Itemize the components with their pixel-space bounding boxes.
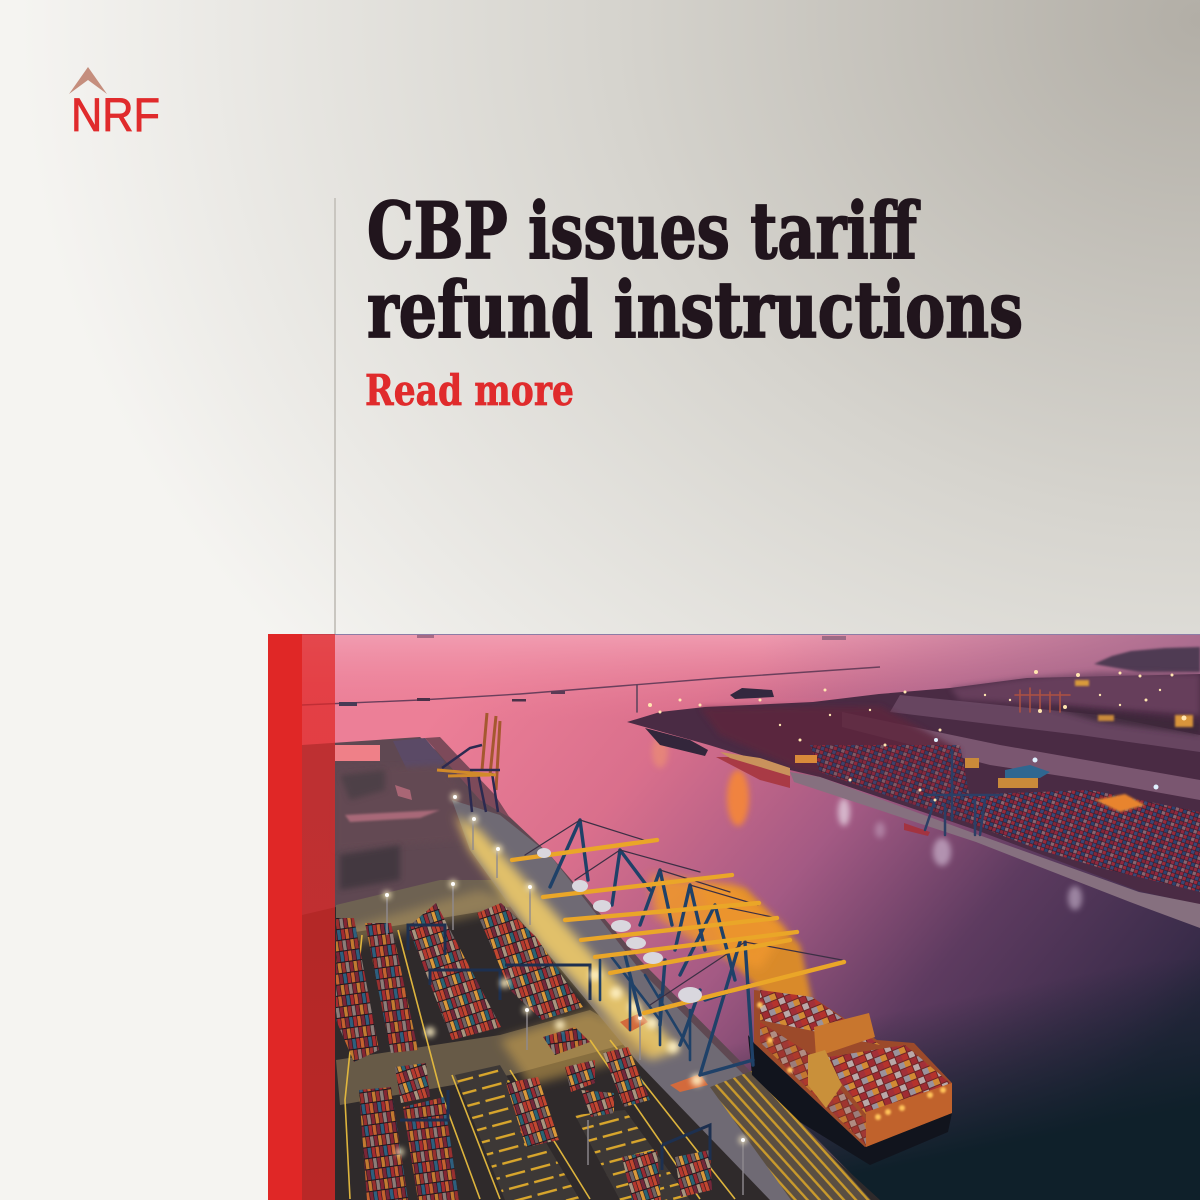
logo: NRF [69,67,160,141]
port lights [383,793,747,1156]
quay cranes [512,820,844,1075]
far cranes [637,685,1070,835]
far lit buildings [795,680,1193,812]
photo: container port at dusk [302,634,1200,1200]
title: refund instructions [367,265,1023,356]
road glow [340,815,680,1085]
breakwater and small ships [302,635,880,706]
hazy sky at right [825,635,1200,680]
far blue-white lights [934,738,1158,790]
main quay stripes [710,1070,871,1200]
red translucent band [302,634,335,1200]
hazy sky and horizon [335,635,1193,702]
crane machine houses [537,848,702,1003]
yard gantry cranes [400,925,710,1170]
orange and white water reflections [652,736,1082,910]
top edge line [302,634,1200,635]
far port lights [648,670,1186,802]
large container ship [700,885,952,1165]
red solid band [268,634,302,1200]
yellow yard lane lines [345,930,735,1199]
distant headland [1094,647,1200,672]
crane structures [550,820,753,1075]
far left quay crane [437,713,500,812]
apron pads [620,1013,708,1092]
dark terminal yard base [302,880,880,1200]
vertical divider line [334,198,336,634]
icon: roof chevron [69,67,107,94]
lit yard cross road [336,880,510,932]
title: CBP issues tariff [367,186,921,277]
ship-side crane glow [650,875,785,970]
far quay strip [790,772,1200,928]
crane booms [512,840,844,1013]
call to action: read more: Read more [365,366,574,415]
container stacks [336,903,712,1200]
yard light poles [387,820,743,1195]
logo wordmark: NRF [71,88,160,141]
far port land [627,672,1200,905]
deep water at lower right [734,989,1200,1200]
left dirt reclaimed land [302,737,877,1200]
far moored ships [645,728,930,836]
title [367,186,1023,356]
far container yard [960,790,1200,892]
crane stays [525,820,842,1005]
water [302,634,1200,1200]
parking bays [455,1065,580,1200]
lit main apron road [452,800,791,1200]
